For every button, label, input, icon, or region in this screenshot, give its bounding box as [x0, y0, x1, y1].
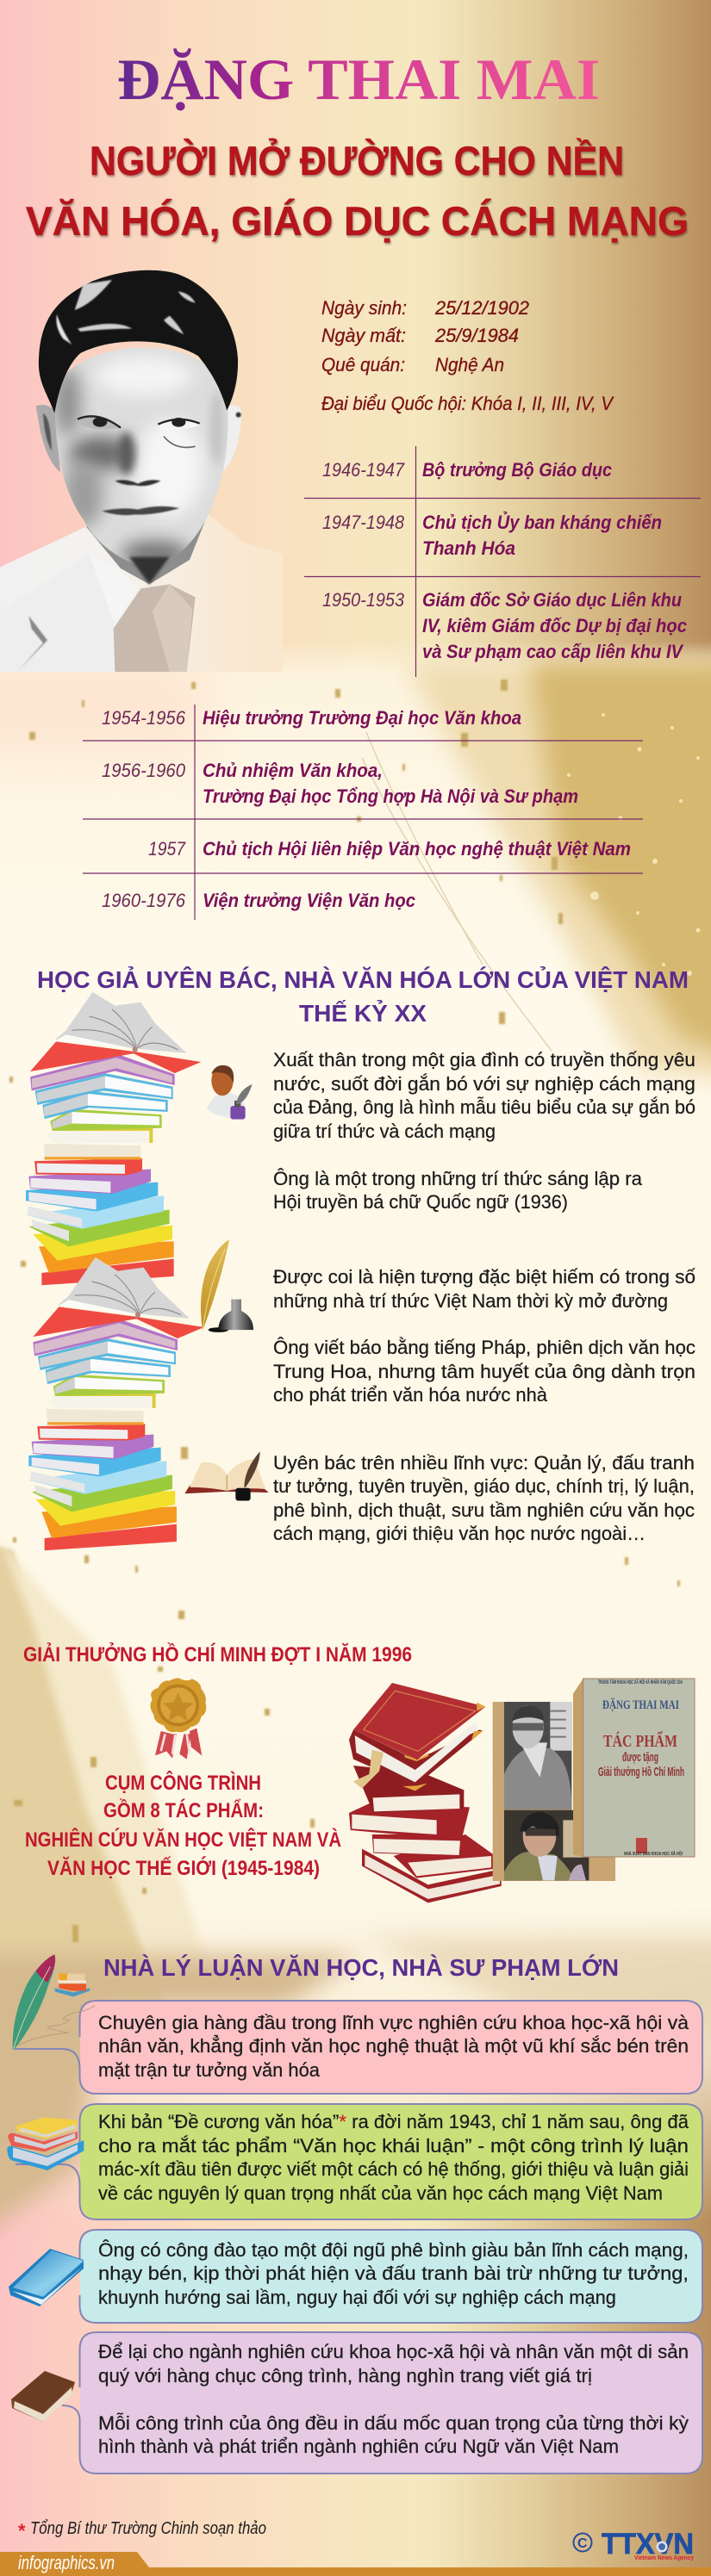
panel: box cyan: nhạy bén, kịp thời phát hiện và đấu tranh bài trừ những tư tưởng, — [98, 2263, 689, 2284]
panel: box lilac — [62, 2332, 702, 2474]
body text: biography: những nhà trí thức Việt Nam thời kỳ mở đường — [273, 1290, 668, 1312]
body text: biography: cho phát triển văn hóa nước nhà — [273, 1384, 547, 1406]
heading: scholar: THẾ KỶ XX — [299, 999, 427, 1027]
award description: VĂN HỌC THẾ GIỚI (1945-1984) — [47, 1856, 320, 1880]
timeline 1954-1976: Chủ tịch Hội liên hiệp Văn học nghệ thuật Việt Nam — [203, 838, 631, 860]
icon: blue book — [9, 2249, 84, 2306]
book cover and photos — [493, 1679, 695, 1881]
icon: book stack two — [28, 1257, 204, 1550]
panel: box cyan: Ông có công đào tạo một đội ngũ phê bình giàu bản lĩnh cách mạng, — [98, 2239, 689, 2261]
footnote: Tổng Bí thư Trường Chinh soạn thảo — [30, 2519, 266, 2538]
panel: box pink: Chuyên gia hàng đầu trong lĩnh vực nghiên cứu khoa học-xã hội và — [98, 2012, 689, 2033]
panel: box green: về các nguyên lý quan trọng nhất của văn học cách mạng Việt Nam — [98, 2182, 663, 2204]
personal info: Ngày mất: — [321, 325, 406, 346]
body text: biography: Ông viết báo bằng tiếng Pháp, phiên dịch văn học — [273, 1337, 695, 1358]
icon: gold quill and inkwell — [201, 1239, 253, 1332]
body text: biography — [273, 1049, 695, 1544]
panel: box cyan: khuynh hướng sai lầm, nguy hại đối với sự nghiệp cách mạng — [98, 2287, 616, 2308]
hair — [39, 270, 238, 413]
award description — [25, 1771, 341, 1880]
timeline 1946-1953: IV, kiêm Giám đốc Dự bị đại học — [422, 615, 687, 636]
panel: box cyan — [79, 2230, 702, 2323]
logo: TTXVN: C — [577, 2536, 588, 2551]
panel: box green: Khi bản “Đề cương văn hóa”* ra đời năm 1943, chỉ 1 năm sau, ông đã — [98, 2111, 689, 2132]
timeline 1946-1953: Chủ tịch Ủy ban kháng chiến — [422, 512, 662, 533]
footer site label: infographics.vn — [18, 2552, 115, 2573]
panel: box green — [16, 2104, 702, 2219]
personal info: 25/12/1902 — [434, 297, 529, 319]
subtitle: VĂN HÓA, GIÁO DỤC CÁCH MẠNG — [26, 198, 689, 244]
personal info: 25/9/1984 — [434, 325, 519, 346]
icon: open book with ink — [184, 1451, 269, 1500]
body text: biography: Được coi là hiện tượng đặc biệt hiếm có trong số — [273, 1266, 695, 1288]
logo: TTXVN: TTXVN — [602, 2528, 694, 2560]
timeline 1946-1953: 1947-1948 — [322, 512, 405, 533]
body text: biography: Uyên bác trên nhiều lĩnh vực: Quản lý, đấu tranh — [273, 1452, 695, 1474]
icon: gold medal — [151, 1678, 206, 1760]
book cover text — [598, 1679, 684, 1857]
panel: box pink — [12, 2001, 702, 2094]
icon: brown book — [11, 2371, 75, 2422]
book cover text: TÁC PHẨM — [603, 1730, 677, 1751]
award description: NGHIÊN CỨU VĂN HỌC VIỆT NAM VÀ — [25, 1828, 341, 1852]
panel: box green: cho ra mắt tác phẩm “Văn học khái luận” - một công trình lý luận — [98, 2135, 689, 2157]
icon: three books — [7, 2117, 84, 2170]
personal info: Nghệ An — [435, 354, 504, 376]
timeline 1954-1976: 1956-1960 — [102, 760, 186, 781]
body text: biography: giữa trí thức và cách mạng — [273, 1120, 496, 1142]
heading: theorist: NHÀ LÝ LUẬN VĂN HỌC, NHÀ SƯ PHẠM LỚN — [103, 1954, 619, 1981]
panel: box lilac: Mỗi công trình của ông đều in dấu mốc quan trọng của từng thời kỳ — [98, 2412, 689, 2434]
timeline 1954-1976: Trường Đại học Tổng hợp Hà Nội và Sư phạm — [203, 785, 578, 807]
face shading — [54, 356, 224, 567]
personal info: Ngày sinh: — [321, 297, 407, 319]
timeline 1946-1953 — [304, 446, 701, 677]
title: Đặng Thai Mai: ĐẶNG THAI MAI — [117, 47, 600, 112]
panel: box lilac: hình thành và phát triển ngành nghiên cứu Ngữ văn Việt Nam — [98, 2436, 619, 2457]
heading: scholar — [37, 965, 689, 1027]
panel: box lilac: quý với hàng chục công trình, hàng nghìn trang viết giá trị — [98, 2365, 592, 2387]
timeline 1954-1976 — [83, 705, 643, 920]
panel: box pink: nhân văn, khẳng định văn học nghệ thuật là một vũ khí sắc bén trên — [98, 2035, 689, 2057]
body text: biography: phê bình, dịch thuật, sưu tầm nghiên cứu văn học — [273, 1499, 695, 1521]
icon: book stack one — [26, 992, 201, 1285]
icon: red book pile — [349, 1683, 502, 1903]
award heading: GIẢI THƯỞNG HỒ CHÍ MINH ĐỢT I NĂM 1996 — [23, 1642, 412, 1667]
logo: TTXVN: Vietnam News Agency — [634, 2555, 694, 2561]
footnote: * — [18, 2520, 26, 2542]
subtitle: NGƯỜI MỞ ĐƯỜNG CHO NỀN — [90, 138, 624, 183]
award description: CỤM CÔNG TRÌNH — [105, 1771, 261, 1795]
timeline 1946-1953: 1950-1953 — [322, 589, 405, 611]
book cover text: được tặng — [622, 1750, 658, 1765]
body text: biography: nước, suốt đời gắn bó với sự nghiệp cách mạng — [273, 1073, 695, 1095]
body text: biography: Xuất thân trong một gia đình có truyền thống yêu — [273, 1049, 695, 1071]
timeline 1946-1953: và Sư phạm cao cấp liên khu IV — [422, 641, 684, 662]
personal info — [321, 297, 614, 414]
subtitle — [26, 138, 689, 244]
body text: biography: Hội truyền bá chữ Quốc ngữ (1936) — [273, 1191, 568, 1213]
panel: box lilac: Để lại cho ngành nghiên cứu khoa học-xã hội và nhân văn một di sản — [98, 2341, 689, 2362]
footer bar — [0, 2552, 711, 2576]
body text: biography: cách mạng, giới thiệu văn học nước ngoài… — [273, 1523, 646, 1544]
timeline 1954-1976: 1954-1956 — [102, 707, 186, 729]
heading: scholar: HỌC GIẢ UYÊN BÁC, NHÀ VĂN HÓA LỚN CỦA VIỆT NAM — [37, 965, 689, 993]
timeline 1946-1953: 1946-1947 — [322, 459, 405, 481]
body text: biography: Ông là một trong những trí thức sáng lập ra — [273, 1168, 642, 1189]
timeline 1954-1976: Hiệu trưởng Trường Đại học Văn khoa — [203, 707, 521, 729]
award description: GỒM 8 TÁC PHẨM: — [103, 1798, 264, 1822]
timeline 1946-1953: Bộ trưởng Bộ Giáo dục — [422, 459, 612, 481]
icon: scholar with quill — [207, 1065, 253, 1120]
body text: biography: tư tưởng, tuyên truyền, giáo dục, chính trị, lý luận, — [273, 1475, 695, 1497]
footnote — [18, 2519, 266, 2542]
icon: feather and small books — [13, 1954, 95, 2051]
shirt and jacket — [0, 515, 283, 672]
photo: portrait in suit — [504, 1702, 571, 1809]
timeline 1946-1953: Thanh Hóa — [422, 537, 515, 559]
personal info: Quê quán: — [321, 354, 405, 376]
body text: biography: của Đảng, ông là hình mẫu tiêu biểu của sự gắn bó — [273, 1096, 695, 1118]
portrait photo — [0, 270, 283, 672]
panel: box green: mác-xít đầu tiên được viết một cách có hệ thống, giới thiệu và luận giải — [98, 2158, 689, 2180]
timeline 1954-1976: 1957 — [148, 838, 186, 860]
personal info: Đại biểu Quốc hội: Khóa I, II, III, IV, V — [321, 393, 614, 414]
timeline 1954-1976: Chủ nhiệm Văn khoa, — [203, 760, 383, 781]
timeline 1954-1976: 1960-1976 — [102, 890, 186, 911]
timeline 1946-1953: Giám đốc Sở Giáo dục Liên khu — [422, 589, 682, 611]
photo: with cigarette — [504, 1810, 589, 1880]
book cover text: NHÀ XUẤT BẢN KHOA HỌC XÃ HỘI — [624, 1850, 683, 1857]
timeline 1954-1976: Viện trưởng Viện Văn học — [203, 890, 415, 911]
book cover text: ĐẶNG THAI MAI — [602, 1698, 679, 1712]
body text: biography: Trung Hoa, nhưng tâm huyết của ông dành trọn — [273, 1361, 695, 1382]
panel: box pink: mặt trận tư tưởng văn hóa — [98, 2059, 320, 2081]
